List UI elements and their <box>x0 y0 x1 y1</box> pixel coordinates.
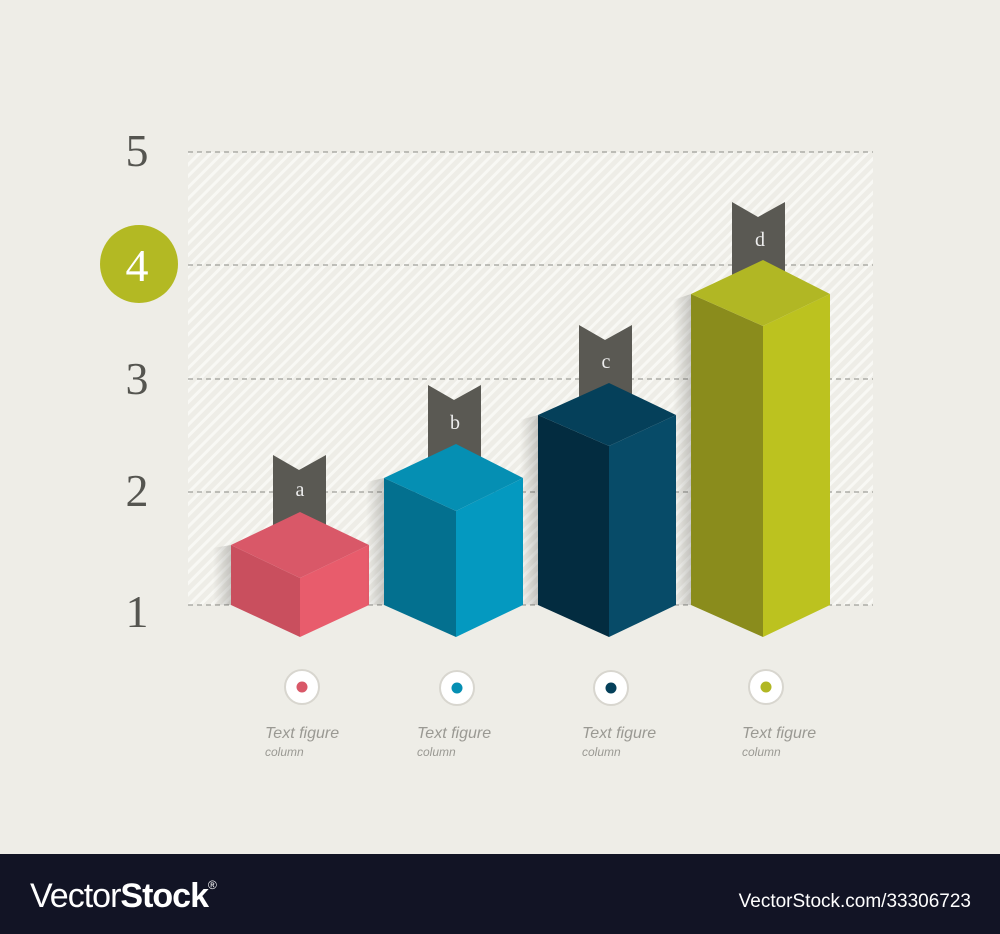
legend labels <box>265 725 816 759</box>
bar d <box>673 202 830 637</box>
axis labels <box>100 125 178 637</box>
legend labels: Text figure <box>417 725 491 742</box>
axis labels: 1 <box>126 586 148 637</box>
axis labels: 2 <box>126 465 148 516</box>
legend <box>285 670 783 705</box>
footer <box>0 854 1000 934</box>
footer: VectorStock.com/33306723 <box>739 891 971 912</box>
legend labels: column <box>265 745 304 759</box>
bar b <box>366 385 523 637</box>
legend labels: Text figure <box>265 725 339 742</box>
footer: VectorStock <box>30 877 208 915</box>
axis labels: 3 <box>126 353 148 404</box>
axis labels: 5 <box>126 125 148 176</box>
legend labels: Text figure <box>582 725 656 742</box>
hatched plot area <box>188 152 873 605</box>
footer: ® <box>208 878 217 892</box>
bar b: b <box>450 412 460 434</box>
bar d: d <box>755 229 765 251</box>
bar c <box>520 325 676 637</box>
bar a <box>213 455 369 637</box>
legend labels: column <box>582 745 621 759</box>
legend labels: Text figure <box>742 725 816 742</box>
legend labels: column <box>742 745 781 759</box>
bar a: a <box>296 479 305 501</box>
bar c: c <box>602 351 611 373</box>
axis labels: 4 <box>126 240 148 291</box>
legend labels: column <box>417 745 456 759</box>
